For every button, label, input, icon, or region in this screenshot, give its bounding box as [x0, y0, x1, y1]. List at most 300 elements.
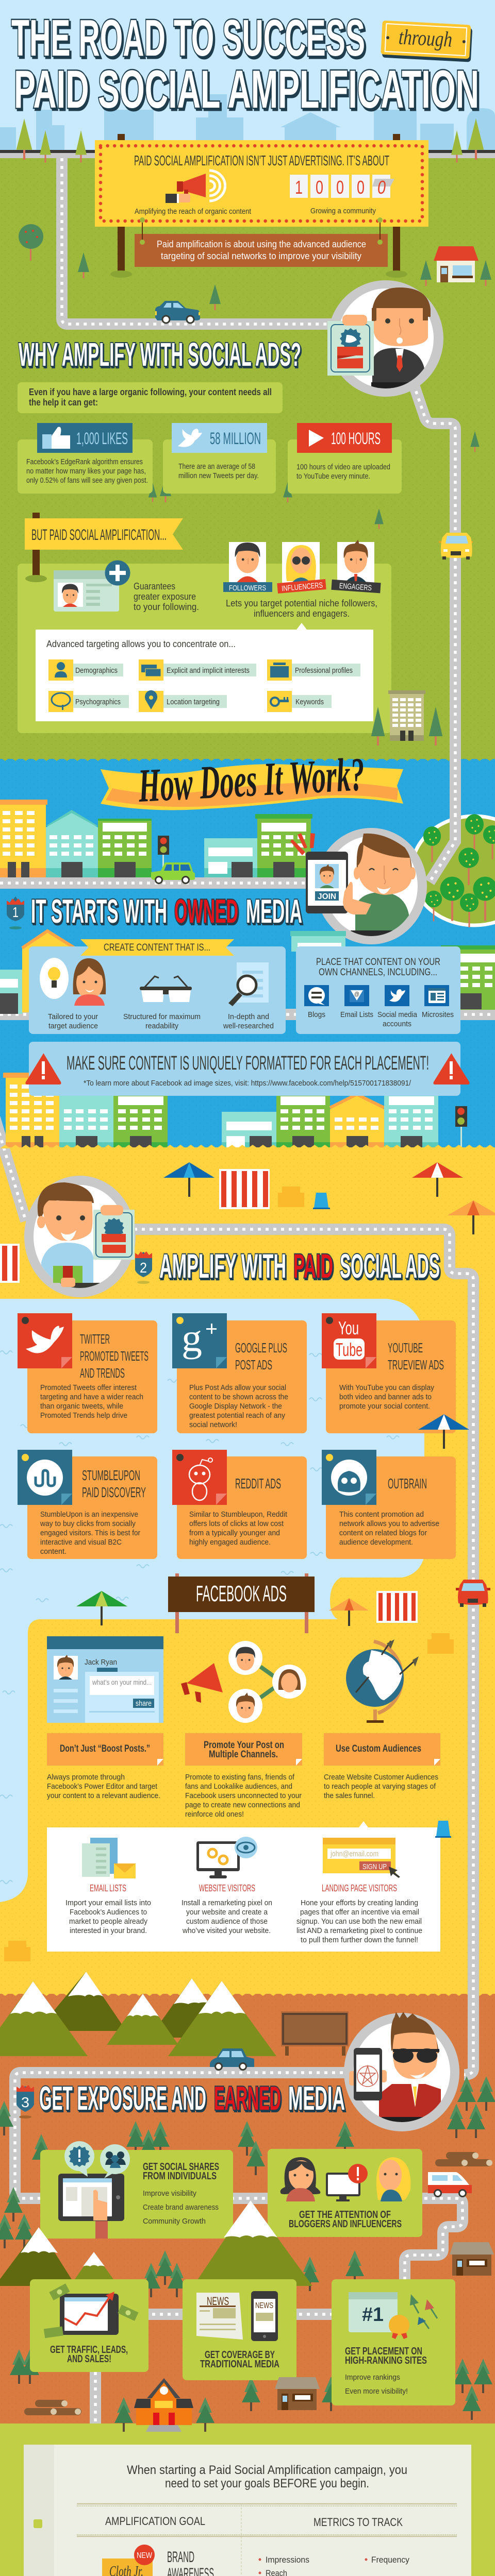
panel: bloggers: BLOGGERS AND INFLUENCERS — [289, 2218, 402, 2230]
tag: influencers: INFLUENCERS — [282, 581, 323, 593]
text: landing page: pages that offer an incentive via email — [300, 1908, 419, 1917]
card: outbrain: audience development. — [339, 1538, 413, 1547]
road: top horizon — [0, 150, 495, 158]
card: google plus — [172, 1313, 307, 1433]
icon: email lists — [82, 1838, 136, 1878]
tab: custom audiences — [324, 1733, 440, 1766]
text: exposure: Guarantees — [134, 581, 175, 591]
panel: social shares: Create brand awareness — [143, 2203, 219, 2212]
background: lime section — [0, 2424, 495, 2576]
background: city section — [0, 759, 495, 1147]
logs — [435, 2152, 492, 2166]
text: landing page: list AND a remarketing pixel to continue — [296, 1926, 422, 1935]
panel: place content: Blogs — [308, 1010, 325, 1019]
table header: AMPLIFICATION GOAL — [105, 2515, 205, 2528]
text: landing page: signup. You can use both the new email — [296, 1917, 422, 1926]
shield 3 — [16, 2085, 34, 2119]
stat: tweets: There are an average of 58 — [178, 462, 255, 471]
icon: stumbleupon square — [18, 1450, 72, 1505]
intro text: need to set your goals BEFORE you begin. — [165, 2477, 369, 2490]
item: professional — [267, 659, 360, 681]
facebook mock: Jack Ryan — [85, 1658, 117, 1667]
table header — [105, 2515, 403, 2529]
row: brand awareness: BRAND — [167, 2549, 194, 2566]
item: demographics — [48, 659, 123, 681]
heading: step 1: IT STARTS WITH — [31, 892, 167, 930]
facebook mock: share — [136, 1699, 152, 1708]
mountains: mid — [0, 2200, 312, 2286]
text: landing page: Hone your efforts by creating landing — [301, 1899, 418, 1907]
tab: multiple channels — [185, 1733, 302, 1766]
icon: number one window — [349, 2292, 437, 2339]
icon: megaphone — [166, 171, 225, 203]
text: audiences column: the sales funnel. — [324, 1791, 375, 1800]
icon: warning left — [25, 1053, 61, 1084]
panel: high ranking: HIGH-RANKING SITES — [345, 2355, 427, 2366]
icon: monitor alert — [326, 2164, 368, 2201]
sand castle — [4, 1941, 30, 1961]
waves — [0, 1351, 399, 1884]
character: happy man with phone — [290, 828, 427, 944]
panel: warning: *To learn more about Facebook ad image sizes, visit: https://www.facebook.com/help/515700171838091/ — [84, 1079, 411, 1088]
captions: target audience — [48, 1022, 98, 1030]
cabin — [450, 2242, 494, 2276]
background: sky — [0, 0, 495, 158]
item: psychographics — [48, 691, 129, 712]
counter: 10000: 0 — [357, 177, 365, 198]
card: stumbleupon: interactive and visual B2C — [40, 1538, 122, 1547]
sand castle — [278, 1187, 304, 1207]
stat: tweets: 58 MILLION — [210, 429, 261, 448]
background: grass section — [0, 158, 495, 759]
caption: community: Growing a community — [310, 207, 376, 215]
card: youtube: TRUEVIEW ADS — [388, 1357, 444, 1372]
shield 3: 3 — [21, 2094, 29, 2110]
water — [0, 1299, 424, 1902]
beach items — [0, 1162, 495, 1283]
umbrella: green — [76, 1591, 127, 1625]
item: professional: Professional profiles — [295, 666, 353, 675]
panel: place content: accounts — [383, 1020, 411, 1028]
through plate: through — [398, 25, 453, 52]
text: website visitors: your website and create a — [186, 1908, 268, 1917]
panel: audience types: EMAIL LISTS — [90, 1883, 126, 1893]
card: outbrain — [322, 1450, 456, 1559]
panel: bloggers — [268, 2149, 422, 2237]
item: location — [139, 690, 227, 712]
panel: place content: Social media — [377, 1010, 418, 1019]
card: outbrain: content on related blogs for — [339, 1529, 427, 1537]
icon: van — [428, 2172, 472, 2197]
icon: megaphone network — [181, 1641, 306, 1723]
accent marks — [290, 833, 315, 855]
sign: facebook ads — [168, 1573, 315, 1633]
heading: step 2: AMPLIFY WITH — [159, 1247, 286, 1285]
card: youtube — [322, 1313, 456, 1433]
icon: glasses — [140, 976, 192, 1002]
panel: traditional media: TRADITIONAL MEDIA — [200, 2359, 279, 2370]
umbrella: orange — [448, 1200, 495, 1234]
icon: signed phone — [354, 2048, 382, 2100]
building: teal — [46, 810, 98, 877]
card: twitter: PROMOTED TWEETS — [80, 1348, 148, 1364]
heading: step 1: MEDIA — [246, 892, 302, 930]
scattered trees on grass — [78, 252, 491, 529]
captions: Structured for maximum — [123, 1012, 201, 1021]
icon: signup form: john@email.com — [330, 1850, 378, 1858]
umbrella: blue — [163, 1162, 214, 1197]
card: outbrain: network allows you to advertise — [339, 1519, 439, 1528]
stat: likes: Facebook’s EdgeRank algorithm ensures — [26, 457, 143, 466]
card: twitter: Promoted Trends help drive — [40, 1411, 127, 1420]
tag: engagers — [331, 580, 381, 593]
card: youtube: YOUTUBE — [388, 1340, 423, 1355]
captions: well-researched — [223, 1022, 274, 1030]
card: reddit: offers lots of clicks at low cost — [189, 1519, 284, 1528]
card: google plus: greatest potential reach of any — [189, 1411, 285, 1420]
sign post — [25, 513, 47, 582]
card: twitter: TWITTER — [80, 1331, 110, 1347]
icon: blogs — [304, 985, 329, 1006]
ribbon: CREATE CONTENT THAT IS... — [104, 942, 210, 953]
tag: engagers: ENGAGERS — [339, 582, 372, 592]
panel: social shares: GET SOCIAL SHARES — [143, 2161, 219, 2173]
captions: In-depth and — [228, 1012, 269, 1021]
icon: tablet chart — [44, 2283, 139, 2338]
icon: newspaper and phone: NEWS — [255, 2301, 273, 2310]
icon: blue car — [210, 2048, 254, 2070]
metrics: brand: Impressions — [266, 2555, 309, 2565]
ribbon — [80, 939, 234, 956]
bucket — [435, 1821, 451, 1838]
panel: traditional media: GET COVERAGE BY — [205, 2349, 275, 2361]
card: google plus: GOOGLE PLUS — [235, 1340, 287, 1355]
panel: billboard — [95, 140, 428, 227]
stat: tweets: million new Tweets per day. — [178, 471, 259, 480]
text: email lists: Facebook’s Audiences to — [70, 1908, 147, 1917]
icon: blonde influencer — [376, 2157, 410, 2201]
facebook mock — [47, 1636, 163, 1723]
text: exposure — [134, 581, 199, 612]
icon: tablet with bubbles — [58, 2141, 130, 2239]
panel: create content — [29, 939, 286, 1034]
item: interests: Explicit and implicit interests — [167, 666, 250, 675]
skyline — [0, 94, 495, 150]
card: youtube: both video and banner ads to — [339, 1393, 432, 1401]
umbrella: blue striped — [418, 1414, 469, 1449]
counter: 10000: 0 — [377, 177, 386, 198]
panel: high ranking: Improve rankings — [345, 2373, 400, 2382]
character: rock star — [344, 2012, 459, 2131]
character: man with poster and money — [24, 1176, 136, 1297]
text: channels column: page to create new connections and — [185, 1801, 300, 1809]
card: reddit: from a typically younger and — [189, 1529, 280, 1537]
icon: youtube square — [322, 1313, 376, 1368]
panel: advanced targeting: Advanced targeting allows you to concentrate on... — [46, 639, 236, 649]
icon: monitor — [196, 1837, 257, 1878]
card: twitter — [18, 1313, 157, 1433]
panel: high ranking: Even more visibility! — [345, 2387, 408, 2396]
card: twitter: targeting and have a wider reach — [40, 1393, 143, 1401]
wooden sign — [281, 2011, 349, 2056]
text: website visitors: Install a remarketing pixel on — [182, 1899, 272, 1907]
heading: step 1: OWNED — [174, 892, 238, 930]
shield 2: 2 — [140, 1260, 147, 1276]
icon: woman with idea — [40, 958, 106, 1006]
panel: high ranking: GET PLACEMENT ON — [345, 2346, 422, 2357]
panel: bloggers: GET THE ATTENTION OF — [299, 2209, 391, 2221]
panel: goals notebook — [24, 2445, 471, 2576]
background: desert section — [0, 1994, 495, 2424]
tab: boost posts — [47, 1733, 163, 1766]
counter: 10000 — [290, 175, 394, 198]
text: email lists: interested in your brand. — [70, 1926, 147, 1935]
card: reddit — [172, 1450, 307, 1559]
icon: green car — [151, 862, 195, 883]
panel: audience types: WEBSITE VISITORS — [199, 1883, 255, 1893]
heading: step 3: MEDIA — [288, 2079, 345, 2117]
tag: followers — [223, 582, 272, 592]
icon: billboard — [102, 2545, 155, 2576]
panel: intro: Even if you have a large organic following, your content needs all — [29, 387, 272, 397]
text: niche: influencers and engagers. — [254, 608, 350, 619]
icon: newspaper and phone: NEWS — [207, 2295, 229, 2308]
shield 1 — [7, 896, 24, 929]
conifers — [0, 2076, 495, 2432]
panel: traffic leads: GET TRAFFIC, LEADS, — [50, 2344, 128, 2355]
item: keywords: Keywords — [295, 698, 324, 706]
text: audiences column: Create Website Customer Audiences — [324, 1773, 438, 1782]
icon: google plus square: g — [182, 1316, 202, 1360]
panel: place content: PLACE THAT CONTENT ON YOUR — [316, 957, 440, 968]
intro text — [127, 2463, 407, 2490]
item: location: Location targeting — [167, 698, 220, 706]
sign: facebook ads: FACEBOOK ADS — [196, 1581, 287, 1606]
heading: step 3: EARNED — [214, 2079, 281, 2117]
building: green tall — [255, 814, 312, 877]
heading: step 2: PAID — [293, 1247, 333, 1285]
towel left — [0, 1244, 20, 1283]
house — [434, 246, 478, 282]
text: boost column: your content to a relevant audience. — [47, 1791, 160, 1800]
captions: readability — [145, 1022, 178, 1030]
tab: boost posts: Don’t Just “Boost Posts.” — [60, 1743, 150, 1754]
text: website visitors: who’ve visited your website. — [182, 1926, 271, 1935]
text: channels column: Promote to existing fans, friends of — [185, 1773, 295, 1782]
card: google plus: content to be shown across the — [189, 1393, 288, 1401]
stat: video hours: to YouTube every minute. — [296, 472, 370, 481]
icon: phone: JOIN — [318, 892, 336, 901]
panel: traffic leads — [30, 2279, 148, 2372]
mountains — [0, 1972, 276, 2056]
text: website visitors: custom audience of those — [186, 1917, 268, 1926]
card: reddit: Similar to Stumbleupon, Reddit — [189, 1510, 288, 1519]
sign: brown description: targeting of social networks to improve your visibility — [161, 251, 361, 261]
card: google plus: Google Display Network - the — [189, 1402, 282, 1411]
icon: taxi — [439, 533, 473, 560]
stat: likes: 1,000 LIKES — [76, 429, 128, 448]
facebook mock: what’s on your mind... — [92, 1678, 152, 1686]
icon: youtube square: Tube — [336, 1339, 362, 1360]
card: twitter: Promoted Tweets offer interest — [40, 1383, 137, 1392]
metrics: brand — [259, 2555, 409, 2576]
text: email lists — [65, 1899, 151, 1935]
panel: intro — [18, 382, 283, 413]
umbrella: red — [412, 1162, 463, 1197]
intro text: When starting a Paid Social Amplification campaign, you — [127, 2463, 407, 2477]
backdrop buildings by panels — [0, 930, 495, 1014]
stat: video hours: 100 hours of video are uploaded — [296, 463, 390, 471]
icon: google plus square — [172, 1313, 227, 1368]
panel: social shares: FROM INDIVIDUALS — [143, 2171, 217, 2182]
forest — [411, 814, 495, 927]
tab: custom audiences: Use Custom Audiences — [336, 1743, 421, 1754]
icon: play — [309, 430, 324, 447]
item: psychographics: Psychographics — [75, 698, 121, 706]
card: stumbleupon: engaged visitors. This is best for — [40, 1529, 140, 1537]
card: reddit: REDDIT ADS — [235, 1476, 281, 1492]
stat: likes — [18, 423, 153, 494]
tag: followers: FOLLOWERS — [229, 584, 266, 592]
icon: blue car — [155, 301, 200, 323]
icon: globe with darts — [346, 1639, 419, 1723]
icon: signup form — [323, 1838, 400, 1878]
icon: microsites — [424, 985, 449, 1006]
text: channels column: Facebook users unconnected to your — [185, 1791, 302, 1800]
icon: twitter — [385, 985, 409, 1006]
card: stumbleupon: content. — [40, 1547, 67, 1556]
text: audiences column: to reach people at varying stages of — [324, 1782, 436, 1791]
icon: bird — [178, 429, 202, 447]
icon: email: @ — [354, 991, 359, 997]
card: youtube: promote your social content. — [339, 1402, 430, 1411]
icon: warning right — [433, 1053, 470, 1084]
panel: warning — [25, 1042, 470, 1096]
icon: woman blogger — [280, 2157, 320, 2201]
icon: twitter square — [18, 1313, 72, 1368]
towel — [376, 1591, 418, 1623]
icon: reddit square — [172, 1450, 227, 1505]
sign: but paid: BUT PAID SOCIAL AMPLIFICATION... — [31, 527, 167, 544]
sign: brown description: Paid amplification is about using the advanced audience — [157, 239, 366, 249]
captions: Tailored to your — [48, 1012, 98, 1021]
counter: 10000: 0 — [316, 177, 323, 198]
towel — [219, 1169, 270, 1209]
text: exposure: to your following. — [134, 602, 199, 612]
text: niche: Lets you target potential niche followers, — [226, 598, 377, 608]
text: landing page — [296, 1899, 422, 1944]
tab: multiple channels: Multiple Channels. — [209, 1749, 278, 1760]
building: green — [98, 819, 152, 877]
text: audiences column — [324, 1773, 438, 1800]
apple tree — [19, 224, 43, 261]
icon: billboard: NEW — [137, 2551, 153, 2560]
panel: audience types — [47, 1821, 440, 1952]
panel: traffic leads: AND SALES! — [67, 2353, 111, 2365]
text: email lists: market to people already — [69, 1917, 147, 1926]
character: host with twitter poster — [327, 280, 443, 397]
banner: how does it work — [101, 748, 403, 812]
icon: email — [344, 985, 369, 1006]
bucket — [313, 1193, 330, 1209]
icon: phone — [306, 852, 348, 913]
logs — [24, 2400, 81, 2415]
icon: magnifier — [228, 962, 269, 1006]
traffic light — [455, 1106, 467, 1147]
panel: traditional media — [183, 2279, 296, 2380]
item: interests — [139, 659, 256, 681]
card: twitter: than organic tweets, while — [40, 1402, 123, 1411]
icon: newspaper and phone — [196, 2291, 278, 2341]
cabin — [275, 2377, 320, 2410]
item: keywords — [267, 691, 332, 712]
icon: signup form: SIGN UP — [362, 1862, 387, 1871]
card: stumbleupon: PAID DISCOVERY — [82, 1484, 146, 1500]
captions — [48, 1012, 274, 1030]
title — [11, 9, 479, 120]
stat: video hours — [288, 423, 402, 494]
card: google plus: Plus Post Ads allow your social — [189, 1383, 286, 1392]
card: reddit: highly engaged audience. — [189, 1538, 271, 1547]
text: email lists: Import your email lists into — [65, 1899, 151, 1907]
billboard posts — [110, 134, 407, 278]
through plate — [381, 21, 473, 62]
text: channels column: reinforce old ones! — [185, 1810, 244, 1819]
panel: place content: OWN CHANNELS, INCLUDING... — [319, 967, 437, 978]
text: website visitors — [182, 1899, 272, 1935]
text: landing page: to pull them further down the funnel! — [301, 1936, 418, 1944]
portraits — [223, 540, 381, 594]
panel: intro: the help it can get: — [29, 397, 98, 408]
icon: thumbs up — [42, 427, 70, 449]
heading: step 3: GET EXPOSURE AND — [39, 2079, 206, 2117]
card: outbrain: OUTBRAIN — [388, 1476, 427, 1492]
text: channels column — [185, 1773, 302, 1819]
icon: red car — [456, 1580, 490, 1607]
top trees — [16, 118, 484, 163]
icon: number one window: #1 — [362, 2304, 384, 2326]
table header: METRICS TO TRACK — [314, 2516, 403, 2529]
sign: but paid — [25, 518, 183, 550]
card: stumbleupon: way to buy clicks from socially — [40, 1519, 136, 1528]
building with trees — [371, 690, 442, 745]
text: boost column: Facebook’s Power Editor and target — [47, 1782, 158, 1791]
panel: place content — [296, 946, 460, 1034]
text: exposure: greater exposure — [134, 591, 196, 602]
school — [134, 2378, 193, 2432]
sand castle — [427, 1633, 454, 1654]
card: stumbleupon: StumbleUpon is an inexpensive — [40, 1510, 138, 1519]
panel: social shares: Community Growth — [143, 2217, 206, 2226]
stat: likes: no matter how many likes your page has, — [26, 467, 146, 476]
row: brand awareness — [102, 2545, 409, 2576]
panel: targeting — [18, 540, 391, 733]
counter: 10000: 0 — [336, 177, 344, 198]
panel: place content: Microsites — [422, 1010, 454, 1019]
card: google plus: social network! — [189, 1420, 237, 1429]
panel: social shares: Improve visibility — [143, 2189, 196, 2198]
icon: profile card — [54, 561, 130, 612]
text: channels column: fans and Lookalike audiences, and — [185, 1782, 292, 1791]
panel: high ranking — [332, 2279, 455, 2405]
stat: video hours: 100 HOURS — [331, 429, 381, 448]
icon: youtube square: You — [338, 1317, 359, 1338]
building: yellow — [0, 800, 47, 877]
city row lower — [3, 1073, 467, 1147]
icon: outbrain square — [322, 1450, 376, 1505]
shield 2 — [135, 1251, 152, 1284]
shield 1: 1 — [12, 904, 19, 920]
